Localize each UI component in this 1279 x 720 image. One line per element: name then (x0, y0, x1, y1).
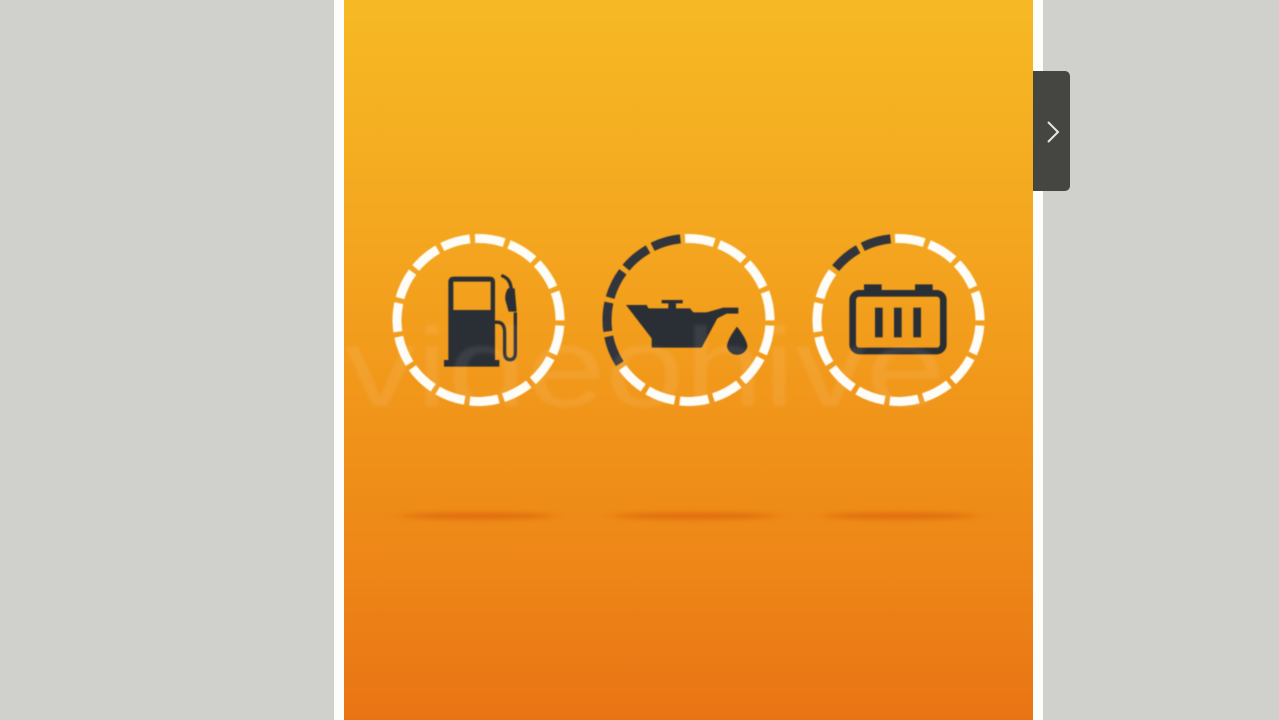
icon: fuel pump (444, 276, 517, 367)
icon: chevron (1048, 122, 1058, 142)
floor shadows (402, 512, 976, 520)
watermark: videohive (345, 305, 945, 430)
icon: oil drop (727, 327, 747, 355)
ring: battery level used (784, 205, 1013, 435)
tab: next arrow (1033, 71, 1070, 191)
ring: fuel level (394, 236, 563, 404)
icon: oil can (626, 300, 747, 355)
icon: battery (853, 284, 943, 351)
ring: battery level remaining (814, 236, 983, 404)
gauge: fuel (394, 236, 563, 404)
gauge: oil (576, 208, 801, 432)
gauge: battery (784, 205, 1013, 435)
panel: orange gradient card (344, 0, 1033, 720)
ring: oil level used (576, 208, 801, 432)
ring: oil level remaining (604, 236, 773, 404)
panel: white frame (334, 0, 1043, 720)
